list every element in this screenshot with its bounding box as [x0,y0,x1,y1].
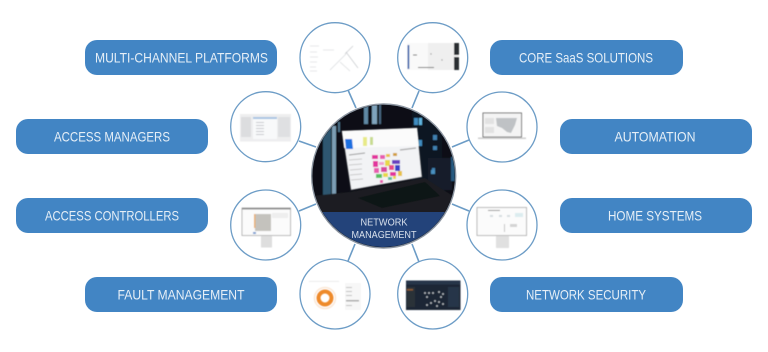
pill: network security: NETWORK SECURITY [526,286,647,302]
central hub: network management: MANAGEMENT [352,229,417,241]
pill: multi-channel platforms: MULTI-CHANNEL PLATFORMS [95,50,268,66]
heatmap blocks [372,155,378,159]
icon circle: core saas screenshot [398,23,468,93]
caption band [322,212,445,247]
icon circle: access managers screenshot [231,92,301,162]
icon circle: automation laptop with map [467,92,537,162]
connector lines [299,90,469,262]
laptop screen [342,128,422,190]
pill: multi-channel platforms [85,40,277,75]
caption text: NETWORK [360,216,408,228]
pill: fault management [85,277,277,312]
hub photo: dark server room with laptop [316,105,455,212]
pill: core saas solutions: CORE SaaS SOLUTIONS [519,50,653,66]
pill: network security [490,277,683,312]
central hub: network management [310,104,458,250]
pill: core saas solutions [490,40,683,75]
pill: access controllers: ACCESS CONTROLLERS [45,208,179,224]
pill: home systems: HOME SYSTEMS [608,208,702,224]
icon circle: multi-channel platforms screenshot [300,23,370,93]
icon circle: network security dark dashboard [398,259,468,329]
pill: automation [560,119,752,154]
pill: access controllers [16,198,208,233]
pill: home systems [560,198,752,233]
pill: access managers [16,119,208,154]
pill: automation: AUTOMATION [614,128,696,144]
pill: access managers: ACCESS MANAGERS [54,128,170,144]
pill: fault management: FAULT MANAGEMENT [118,286,245,302]
icon circle: home systems monitor [467,190,537,260]
icon circle: access controllers monitor [231,190,301,260]
icon circle: fault management donut chart [300,259,370,329]
